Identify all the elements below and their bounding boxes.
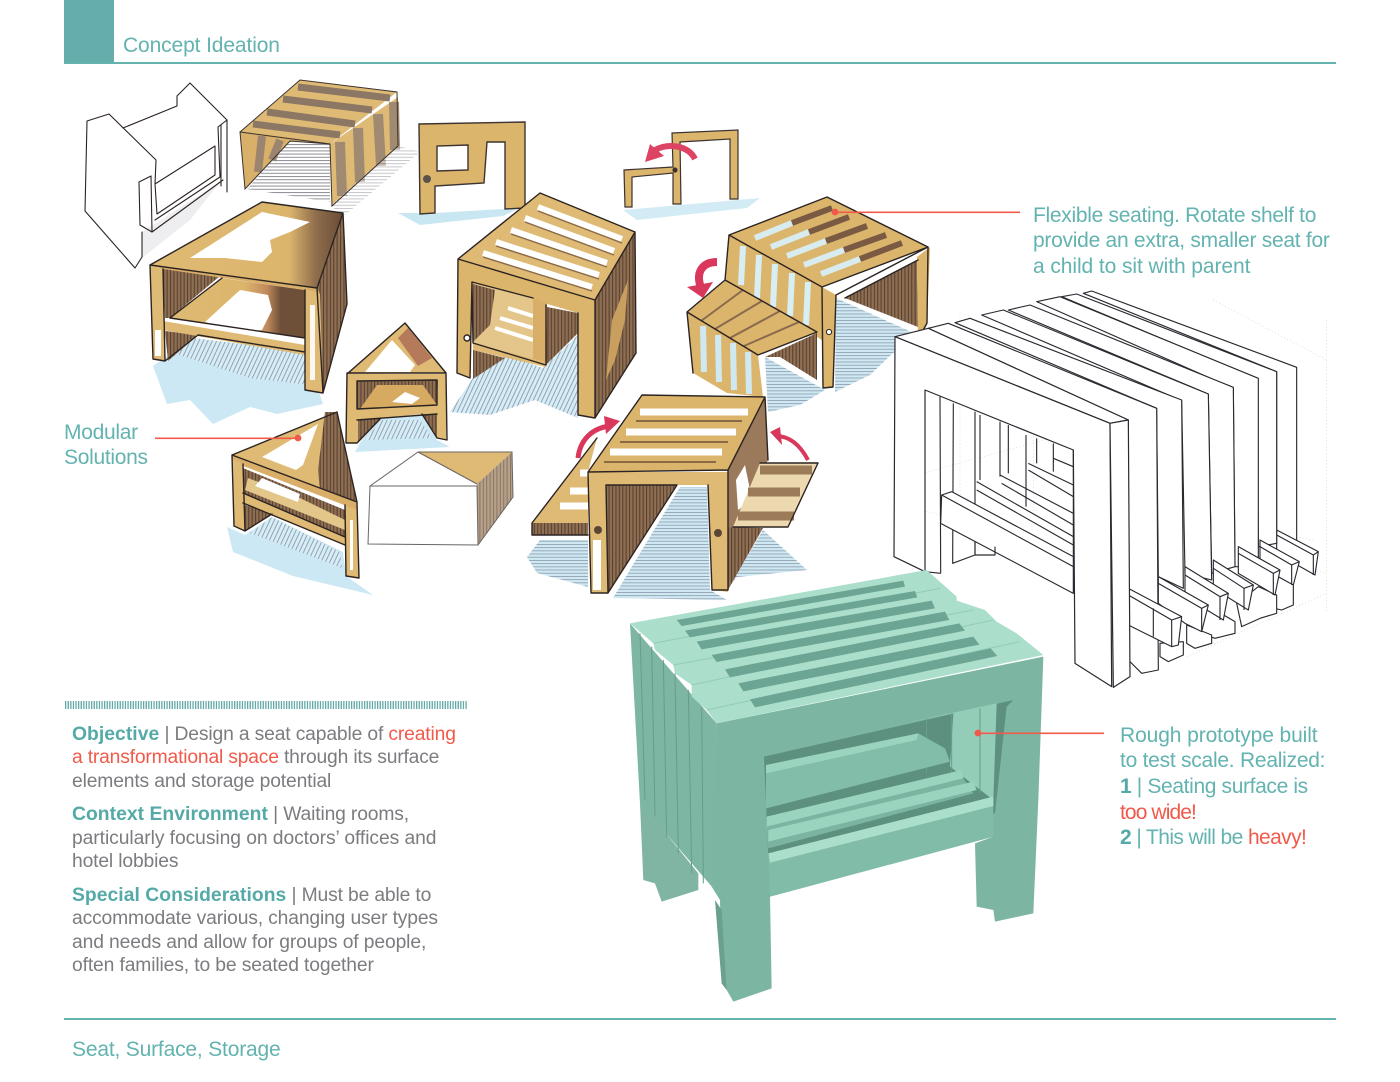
opening interior: [925, 397, 1073, 593]
header tab: [64, 0, 114, 63]
text block: context environment: [72, 804, 436, 872]
title: Concept Ideation: [123, 34, 280, 57]
front frame: [606, 485, 677, 593]
callout: rough prototype: 1 | Seating surface is: [1120, 775, 1308, 798]
front slats: [725, 235, 822, 340]
right face: [317, 213, 347, 393]
text block: context environment: hotel lobbies: [72, 851, 178, 872]
footer rule: [64, 1018, 1336, 1020]
tabletop: [150, 202, 343, 288]
sketch: triangular modular table: [227, 412, 373, 595]
callout: rough prototype: [975, 724, 1325, 849]
text block: context environment: Context Environment | Waiting rooms,: [72, 804, 409, 825]
sketch: wireframe armchair: [85, 83, 227, 268]
interior: [845, 260, 918, 327]
callout: modular solutions: Solutions: [64, 446, 148, 469]
shelf: [170, 278, 305, 338]
folded seat: [687, 280, 817, 397]
callout: rough prototype: to test scale. Realized:: [1120, 749, 1325, 772]
text block: special considerations: often families, to be seated together: [72, 955, 374, 976]
text block: objective: [72, 724, 456, 792]
text block: special considerations: Special Considerations | Must be able to: [72, 885, 431, 906]
callout: flexible seating: a child to sit with parent: [1033, 255, 1251, 278]
callout: rough prototype: too wide!: [1120, 801, 1196, 824]
sketch: plain white wedge block: [368, 452, 513, 545]
slots: [677, 581, 997, 707]
sketch: rotating seat table: [687, 197, 930, 412]
sketch: slatted table with storage: [450, 193, 636, 418]
text block: objective: elements and storage potential: [72, 771, 331, 792]
text block: special considerations: and needs and allow for groups of people,: [72, 932, 426, 953]
panels and rails, back to front: [928, 291, 1318, 673]
text block: special considerations: accommodate various, changing user types: [72, 908, 438, 929]
callout: flexible seating: provide an extra, smaller seat for: [1033, 229, 1330, 252]
red rotate arrow: [699, 262, 717, 290]
sketch: small triangular stool: [346, 323, 450, 452]
front panel: [894, 328, 1130, 687]
decorative tick strip: [64, 701, 468, 709]
sketch: side profile panel with pivot: [398, 122, 525, 225]
callout: rough prototype: Rough prototype built: [1120, 724, 1318, 747]
interior: [163, 268, 220, 318]
text block: objective: a transformational space through its surface: [72, 747, 439, 768]
text block: context environment: particularly focusing on doctors’ offices and: [72, 828, 436, 849]
lower slats: [766, 733, 950, 808]
top surface: [630, 570, 1043, 723]
lower back panel: [165, 331, 198, 361]
side face: [630, 623, 717, 888]
header rule: [64, 62, 1336, 64]
callout: modular solutions: Modular: [64, 421, 138, 444]
seat surface: [729, 197, 928, 287]
floor shadow: [153, 338, 323, 424]
text block: special considerations: [72, 885, 438, 976]
left wing: [532, 438, 597, 535]
sketch: large square table: [150, 202, 347, 424]
sketch: pivot diagram: [623, 130, 760, 220]
rear legs: [640, 803, 698, 902]
sketch: table with fold-out wings: [527, 395, 818, 600]
callout: modular solutions: [64, 421, 301, 469]
beam and legs: [163, 321, 305, 355]
callout: flexible seating: Flexible seating. Rotate shelf to: [1033, 204, 1316, 227]
red arrows: [578, 426, 610, 458]
callout: rough prototype: 2 | This will be heavy!: [1120, 826, 1306, 849]
opening: [764, 700, 1013, 857]
tabletop: [588, 395, 765, 472]
wireframe sketch of full-scale seat: [894, 291, 1327, 687]
sketch: slatted bench: [240, 80, 420, 215]
text block: objective: Objective | Design a seat capable of creating: [72, 724, 456, 745]
callout: flexible seating: [832, 204, 1330, 278]
front rail: [768, 797, 993, 897]
shadows: [835, 298, 918, 392]
front frame: [712, 657, 1043, 1002]
footer title: Seat, Surface, Storage: [72, 1038, 281, 1061]
foam prototype model: [630, 570, 1043, 1002]
right face and steps: [728, 397, 768, 527]
